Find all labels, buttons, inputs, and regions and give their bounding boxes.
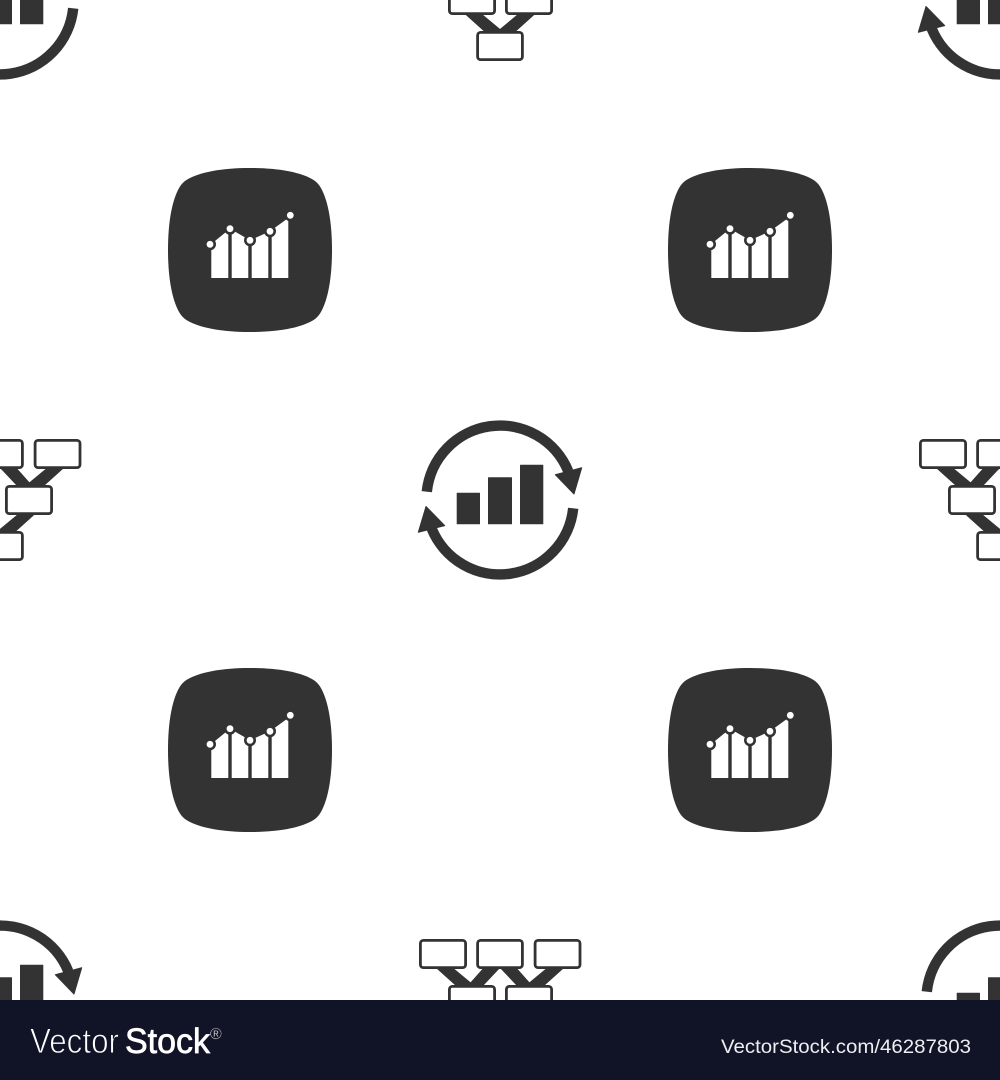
icon: network hierarchy, top edge bbox=[420, 0, 580, 60]
icon: network hierarchy, left edge bbox=[0, 440, 80, 560]
icon: cycle chart, top-left corner bbox=[0, 0, 82, 74]
icon: chart badge, lower right bbox=[668, 668, 832, 832]
icon: cycle chart, bottom-right corner bbox=[918, 926, 1000, 1074]
icon: cycle chart, centre bbox=[418, 426, 582, 574]
icon: cycle chart, bottom-left corner bbox=[0, 926, 82, 1074]
logo wordmark: Vector bbox=[30, 1022, 119, 1061]
icon: network hierarchy, bottom edge bbox=[420, 940, 580, 1060]
logo wordmark: ® bbox=[210, 1026, 222, 1043]
icon: cycle chart, top-right corner bbox=[918, 0, 1000, 74]
icon: network hierarchy, right edge bbox=[920, 440, 1000, 560]
logo wordmark: Stock bbox=[125, 1022, 210, 1061]
icon: chart badge, upper right bbox=[668, 168, 832, 332]
footer banner bbox=[0, 1000, 1000, 1080]
icon: chart badge, upper left bbox=[168, 168, 332, 332]
icon: chart badge, lower left bbox=[168, 668, 332, 832]
logo wordmark bbox=[30, 1022, 222, 1061]
image id url: VectorStock.com/46287803 bbox=[721, 1037, 971, 1058]
